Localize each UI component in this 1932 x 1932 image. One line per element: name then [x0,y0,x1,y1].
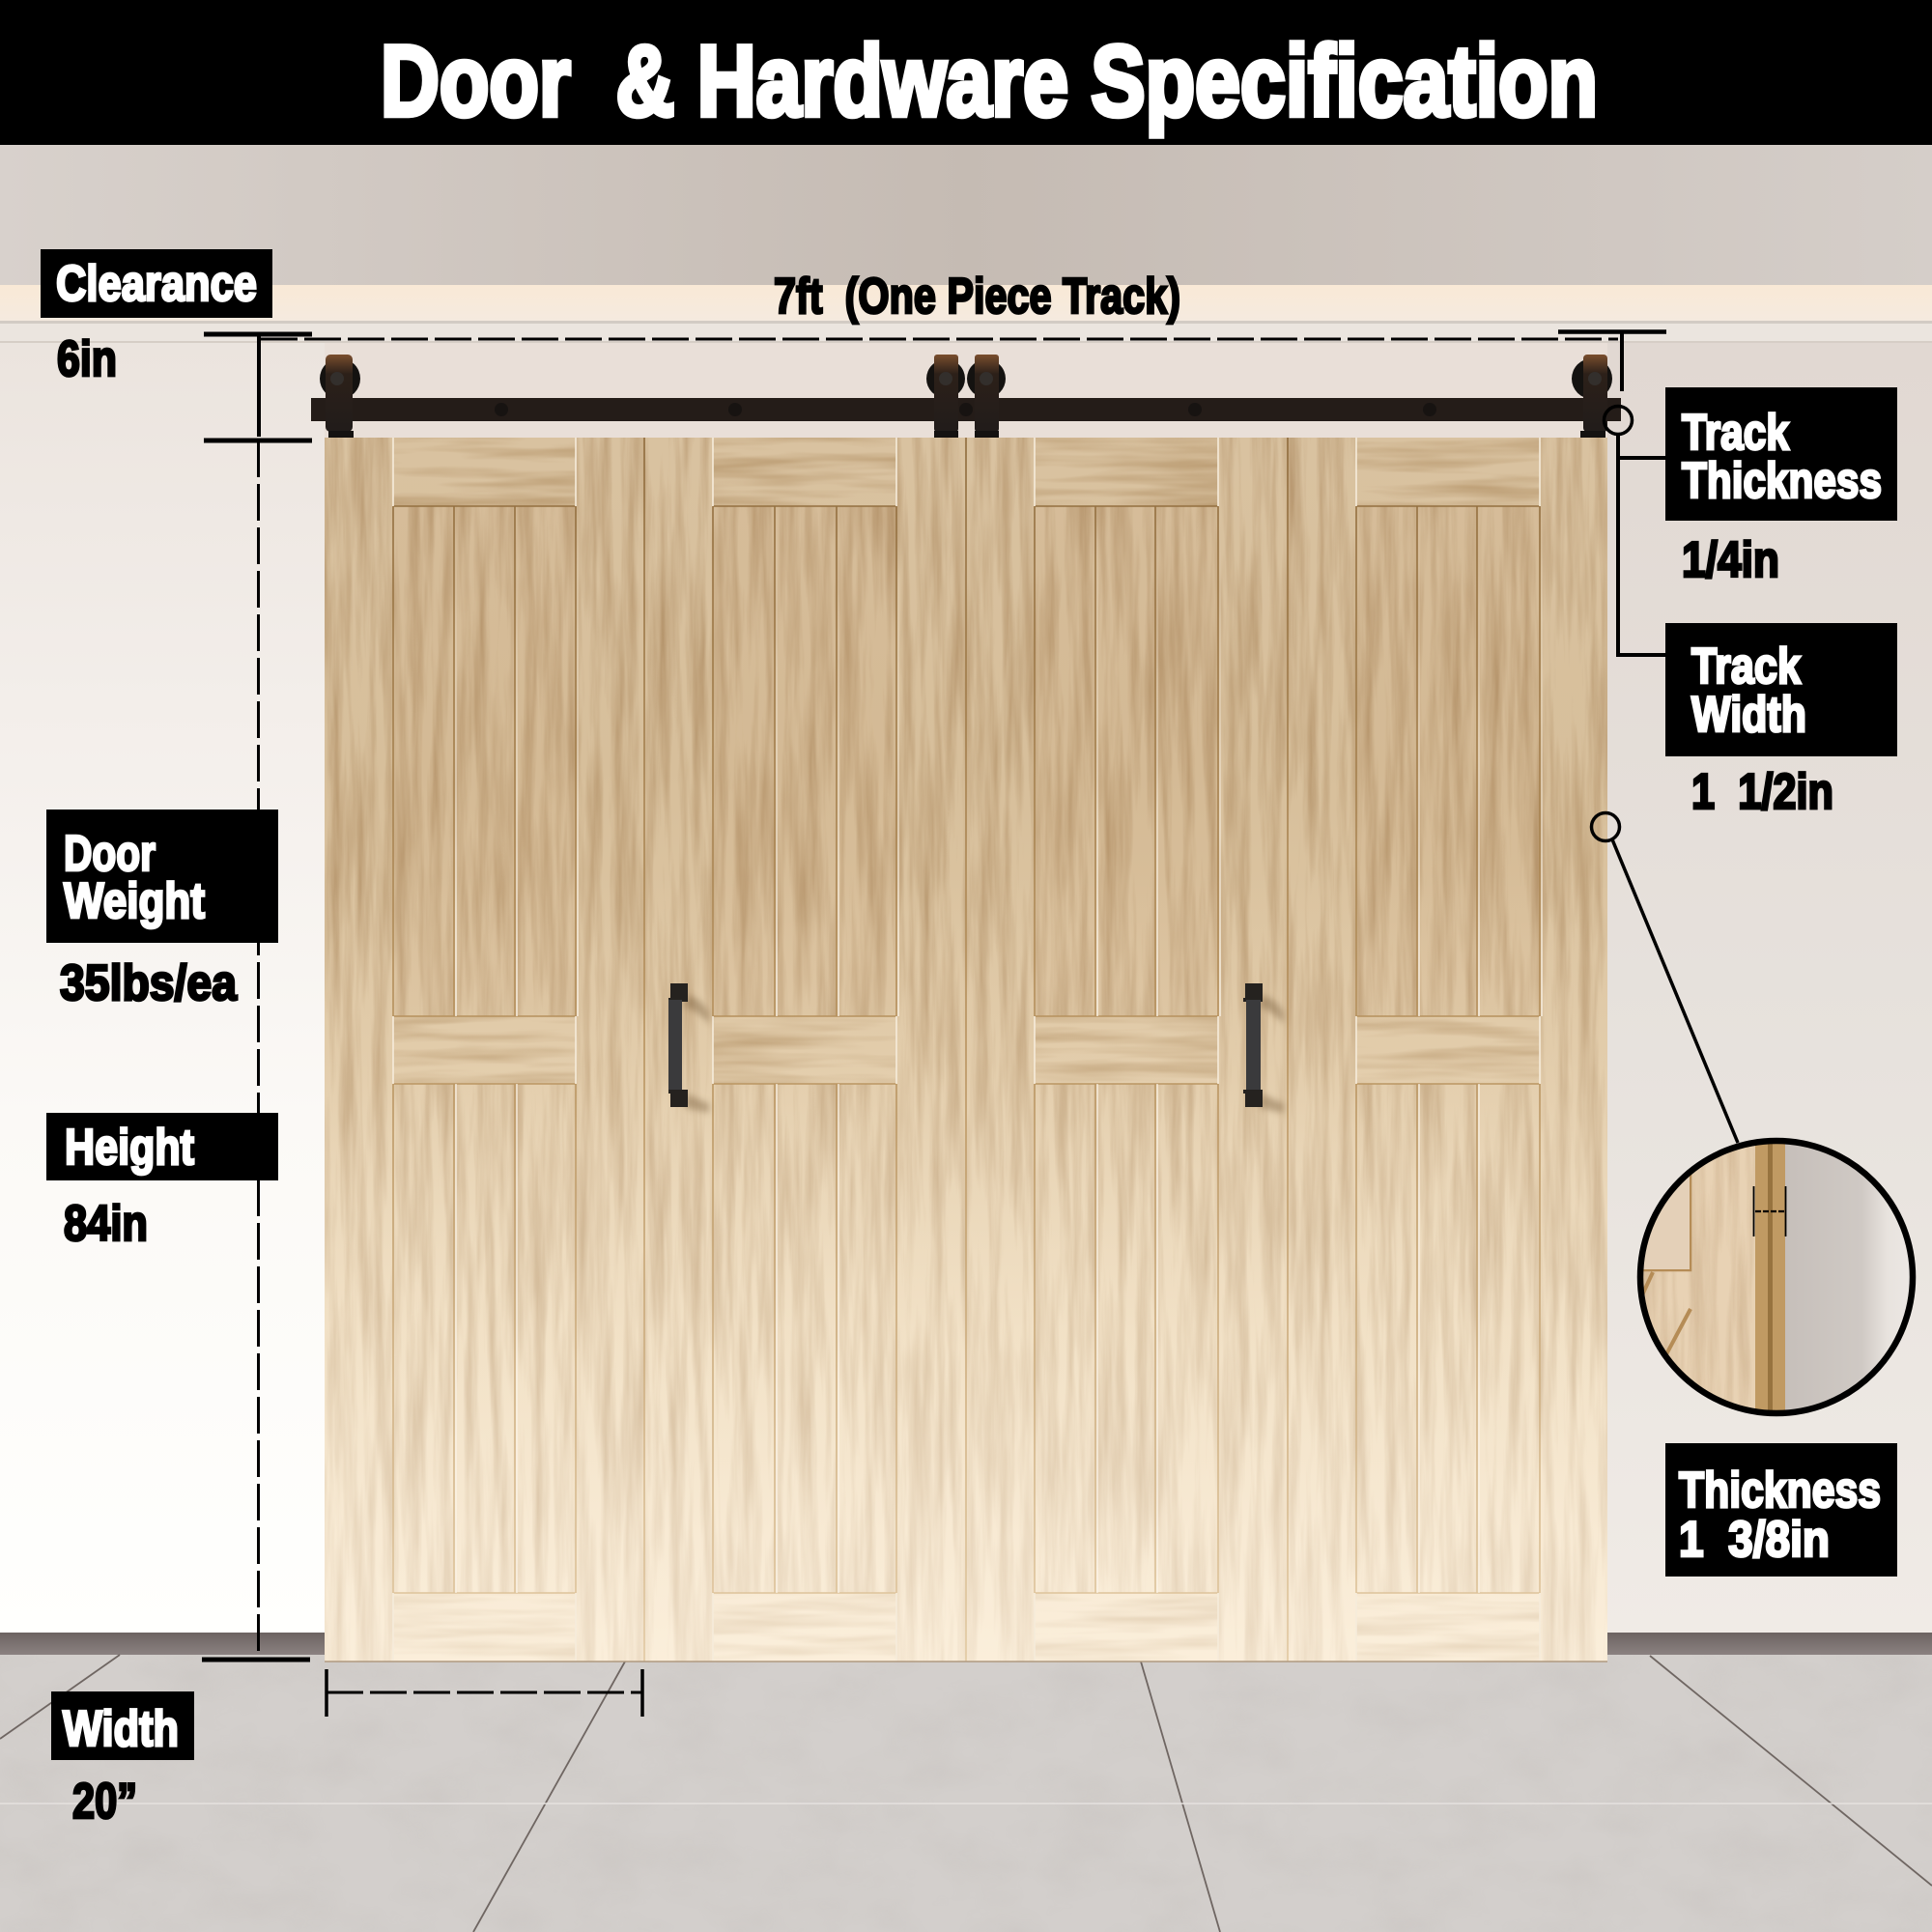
track bolts [495,403,1436,416]
barn doors [325,438,1607,1662]
thickness detail lens [1633,1135,1920,1425]
door bottom edge [325,1661,1607,1662]
track thickness label: Thickness [1682,453,1882,509]
track hardware [311,355,1621,438]
title: Door & Hardware Specification [381,25,1598,137]
rail side edges [393,438,1540,1662]
door seams [644,438,1288,1662]
handle right [1243,983,1284,1113]
header band [0,0,1932,145]
track thickness value: 1/4in [1682,532,1779,588]
track length dashed line [261,331,1666,391]
height label [46,1113,278,1180]
track thickness label [1665,387,1897,521]
cove light strip [0,285,1932,321]
crown molding [0,321,1932,343]
panel grooves light lower [456,1084,1479,1593]
height dashed dimension [202,440,310,1660]
track width value: 1 1/2in [1691,764,1833,820]
clearance label: Clearance [56,256,257,312]
thickness label: Thickness [1679,1463,1881,1519]
rail horizontal grain [394,438,1540,1661]
hanger 1 [320,355,360,438]
height label: Height [65,1120,194,1176]
clearance dimension marks [204,334,312,440]
door wood base [325,438,1607,1662]
track width label: Track [1691,639,1801,695]
door weight label [46,810,278,943]
handle left [668,983,709,1113]
panel grooves light upper [456,506,1542,1016]
grain fade toward bottom [325,869,1607,1662]
hanger 2 [926,355,965,438]
width label: Width [63,1701,179,1757]
wall left [0,343,325,1633]
track callout leader [1604,406,1665,655]
track width label [1665,623,1897,756]
track length label: 7ft (One Piece Track) [774,269,1180,325]
wall above door [325,343,1607,440]
thickness label [1665,1443,1897,1577]
baseboard [0,1633,1932,1656]
vertical wood grain [325,438,1607,1662]
thickness callout leader [1592,813,1738,1143]
upper panel shading [393,506,1540,1016]
clearance value: 6in [57,331,117,387]
ceiling [0,145,1932,285]
width value: 20” [72,1774,137,1830]
door weight value: 35lbs/ea [60,955,238,1011]
door weight label: Door [64,826,156,882]
panel grooves dark [393,506,1540,1593]
track width label: Width [1691,687,1806,743]
hanger 4 [1572,355,1612,438]
wall right [1607,343,1932,1633]
door weight label: Weight [64,873,205,929]
hanger 3 [967,355,1006,438]
track thickness label: Track [1682,405,1789,461]
width dimension [327,1669,642,1717]
floor [0,1655,1932,1932]
track rail [311,398,1621,421]
thickness label: 1 3/8in [1679,1512,1830,1568]
height value: 84in [64,1196,148,1252]
